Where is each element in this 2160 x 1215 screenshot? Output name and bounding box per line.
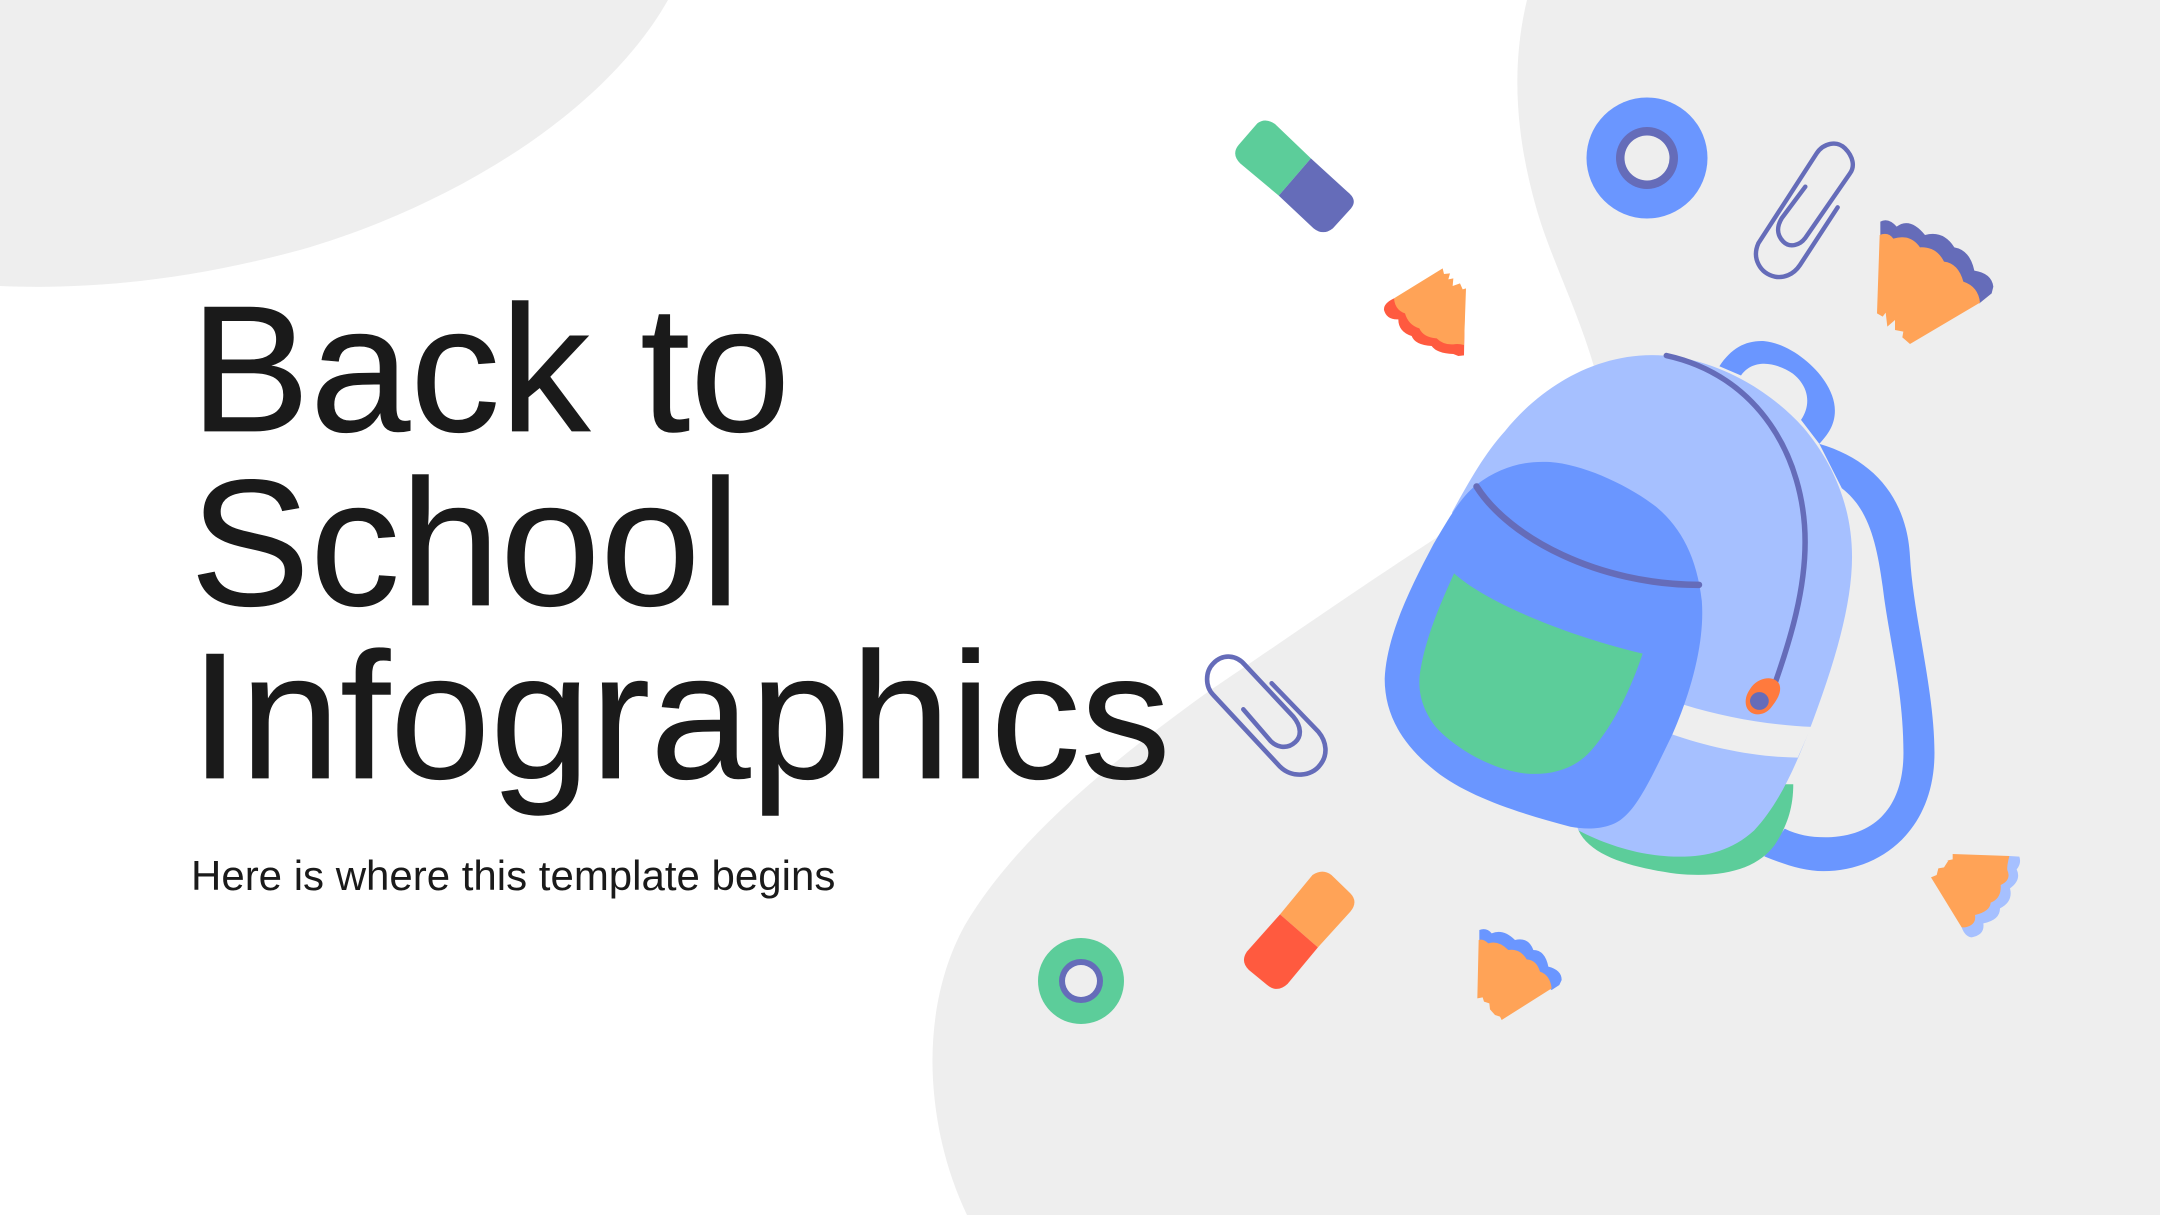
title: School — [190, 442, 740, 644]
background blob: right — [932, 0, 2160, 1215]
illustration: backpack — [1385, 341, 1934, 875]
icon: paperclip top — [1756, 144, 1853, 277]
backpack bottom green — [1579, 784, 1793, 875]
background blob: top left — [0, 0, 668, 287]
zipper line: pocket — [1477, 486, 1699, 585]
backpack top handle — [1719, 341, 1835, 444]
backpack front pocket — [1385, 462, 1702, 828]
icon: pencil shaving far right — [1931, 854, 2020, 937]
icon: green eraser — [1235, 120, 1354, 232]
backpack white band — [1672, 705, 1811, 758]
backpack strap — [1764, 444, 1934, 871]
illustrations: erasers and rings — [1038, 98, 1708, 1024]
zipper line: main — [1666, 356, 1805, 683]
title: Infographics — [190, 616, 1171, 817]
icon: pencil shaving left — [1384, 268, 1466, 356]
title: Back to — [190, 269, 790, 470]
icon: paperclip left — [1207, 657, 1325, 775]
icon: blue tape ring — [1586, 98, 1708, 218]
subtitle: Here is where this template begins — [191, 852, 835, 899]
icon: green tape ring — [1038, 938, 1124, 1024]
icon: pencil shaving bottom — [1477, 929, 1562, 1020]
zipper puller — [1746, 678, 1780, 714]
title — [190, 269, 1171, 817]
pocket green panel — [1419, 573, 1643, 774]
icon: orange red eraser — [1244, 872, 1354, 989]
backpack body — [1452, 355, 1852, 857]
icon: pencil shaving right — [1877, 220, 1993, 344]
